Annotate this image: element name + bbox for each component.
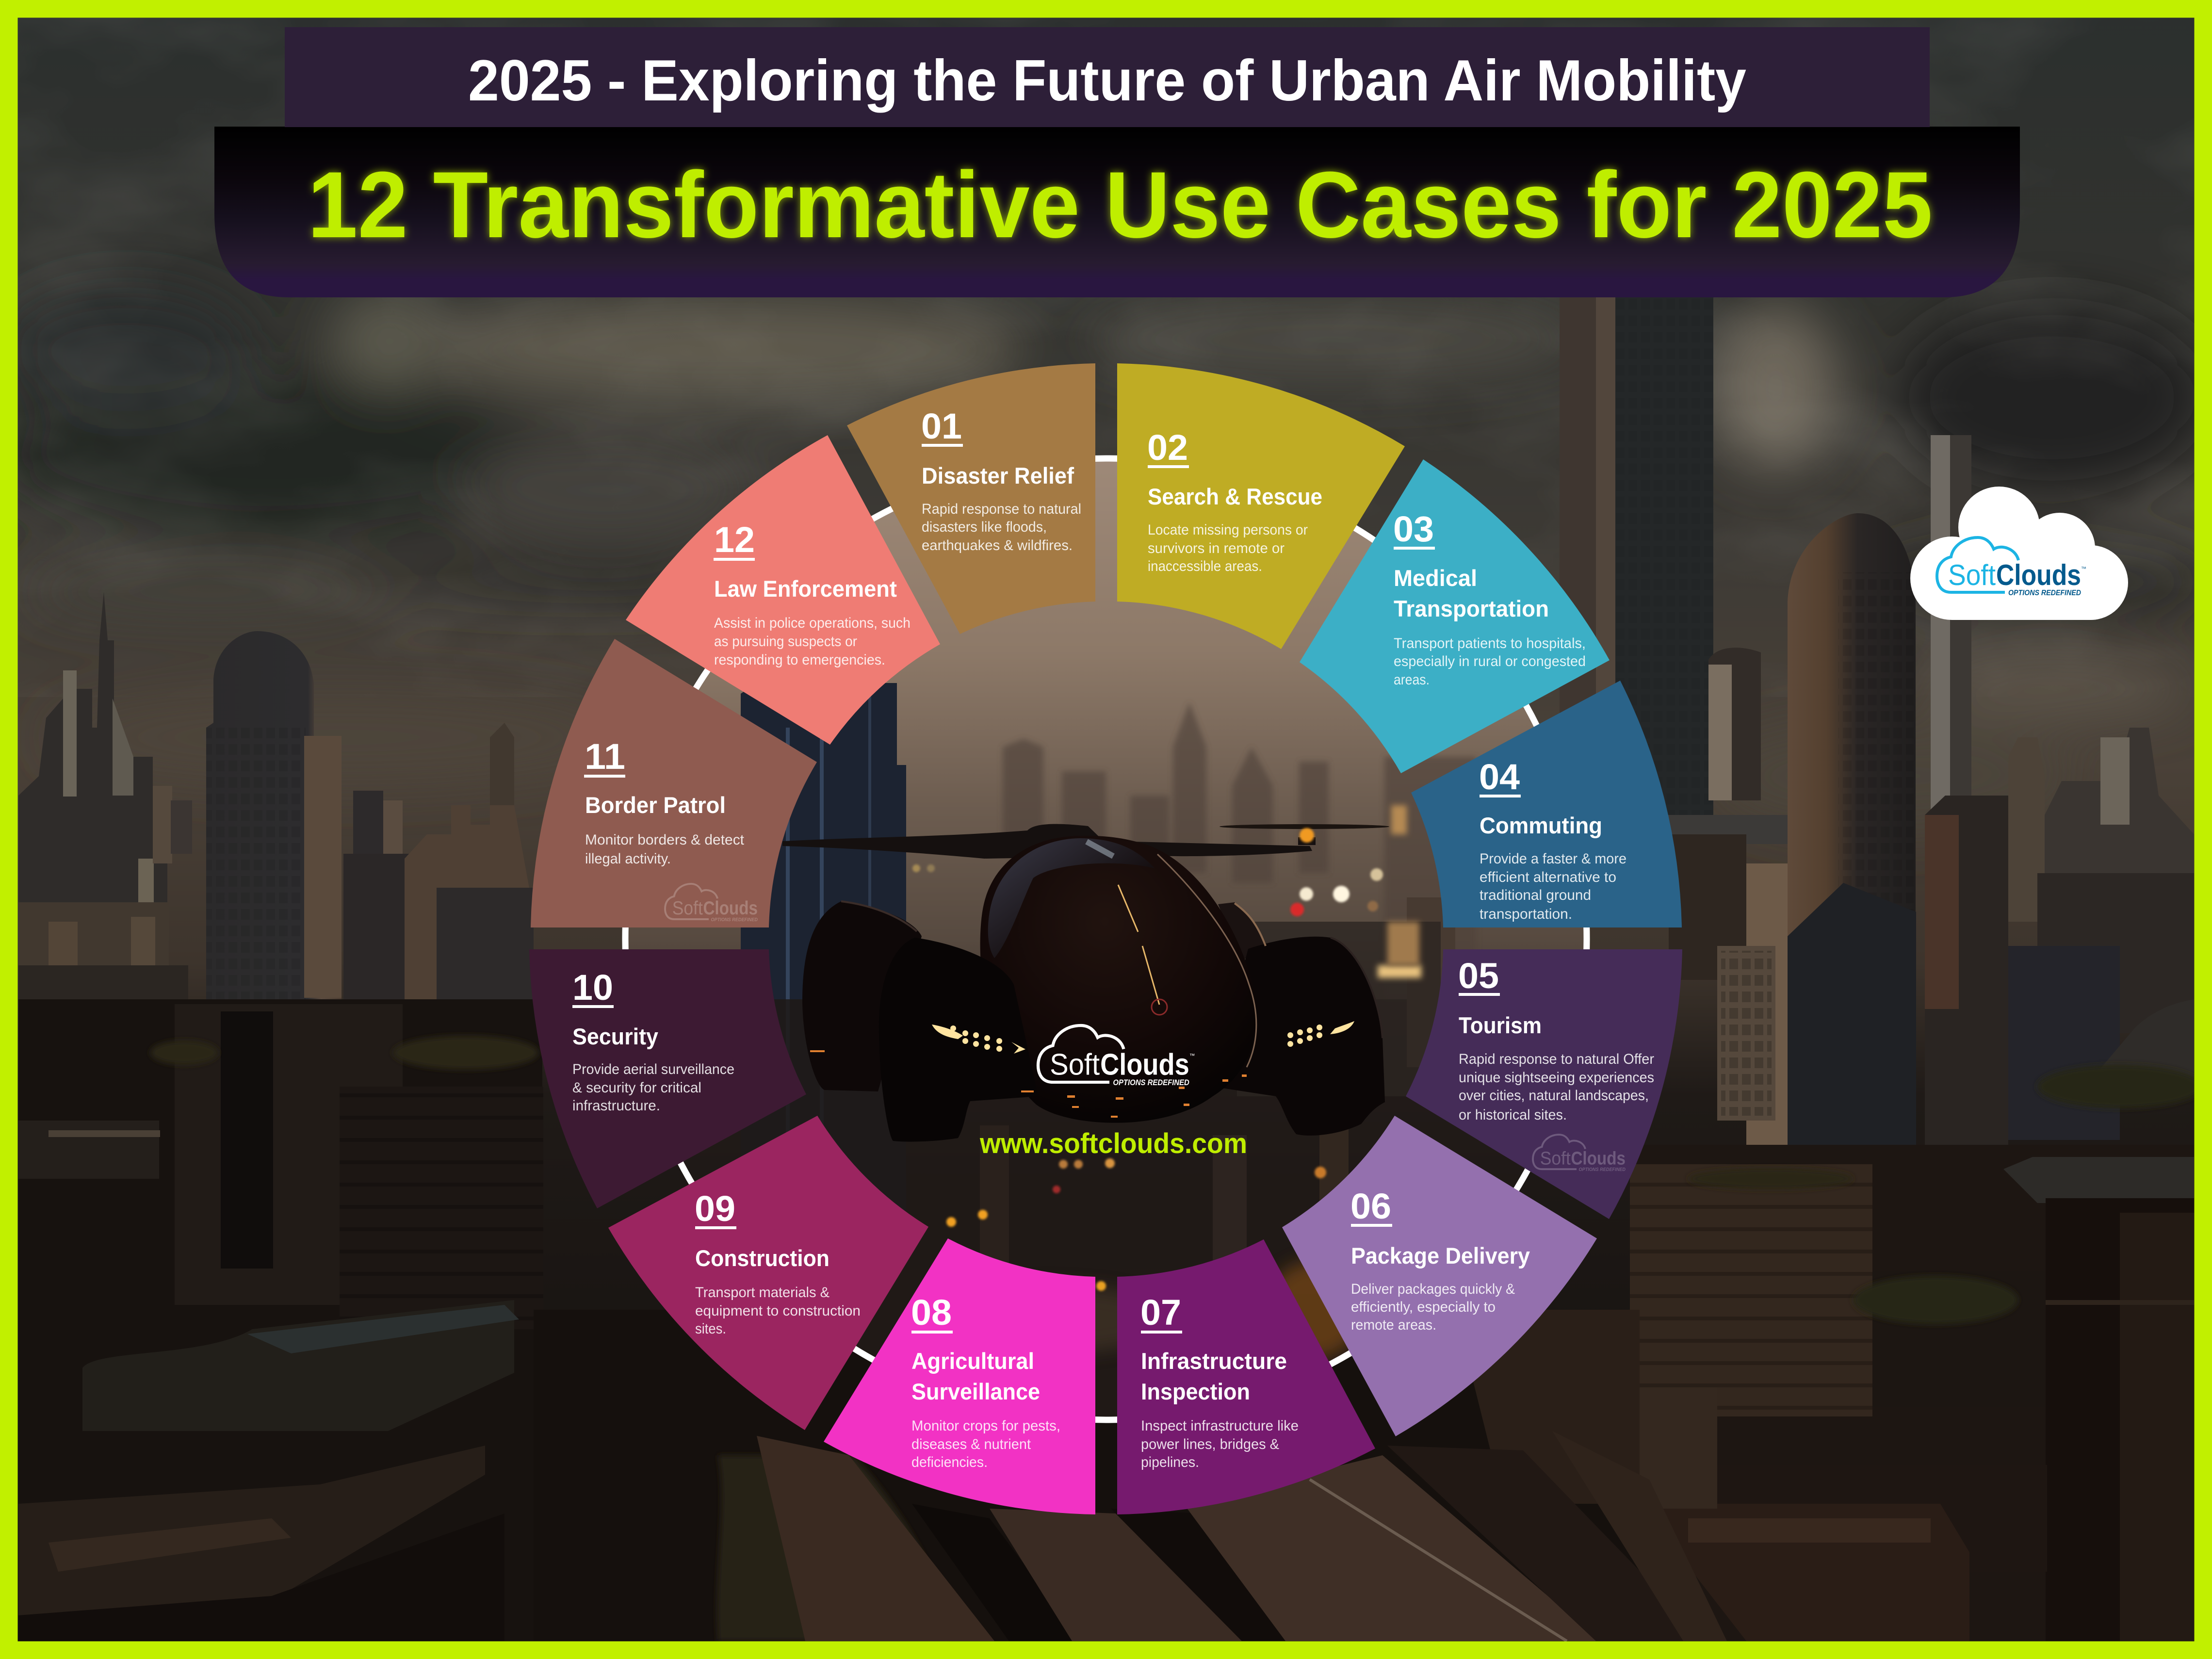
description: transportation. <box>1480 906 1572 922</box>
title: Law Enforcement <box>714 576 897 602</box>
panel: 04 Commuting <box>1411 681 1682 927</box>
canopy sheen <box>988 838 1155 958</box>
main fuselage <box>980 836 1257 1123</box>
title: Agricultural <box>911 1348 1034 1374</box>
logo: SoftClouds cloud badge: ™ <box>2081 566 2086 572</box>
description <box>1459 1051 1654 1123</box>
description <box>695 1285 861 1337</box>
logo: white SoftClouds on car: Clouds <box>1100 1048 1189 1081</box>
description: Provide a faster & more <box>1480 851 1626 867</box>
description: responding to emergencies. <box>714 652 885 668</box>
rotor and wing light <box>1220 824 1389 845</box>
title: 12 Transformative Use Cases: 12 Transformative Use Cases for 2025 <box>308 152 1933 258</box>
flying car <box>782 824 1389 1142</box>
description: Transport materials & <box>695 1285 830 1301</box>
description: Monitor borders & detect <box>585 832 745 848</box>
far skyline left <box>18 592 192 1024</box>
watermark logo: Clouds <box>1571 1148 1626 1169</box>
description: sites. <box>695 1321 726 1337</box>
description <box>1141 1418 1299 1470</box>
number 01: 01 <box>921 406 962 446</box>
watermark logo <box>665 884 758 923</box>
headlights <box>932 1021 1354 1054</box>
description: equipment to construction <box>695 1303 861 1319</box>
description <box>1480 851 1626 922</box>
number 03: 03 <box>1393 509 1434 549</box>
number 07: 07 <box>1140 1292 1181 1333</box>
title: Security <box>572 1024 658 1049</box>
description: Rapid response to natural <box>922 501 1081 517</box>
description: traditional ground <box>1480 887 1591 903</box>
tower: left cylinder <box>206 631 342 1009</box>
number 04: 04 <box>1479 757 1520 797</box>
panel: 10 Security <box>529 949 806 1208</box>
description: pipelines. <box>1141 1454 1199 1470</box>
panel: 07 Infrastructure Inspection <box>1117 1239 1375 1514</box>
number 08: 08 <box>911 1292 952 1333</box>
tall building top right <box>1560 296 1795 1150</box>
logo: white SoftClouds on car <box>1038 1025 1195 1087</box>
title: Inspection <box>1141 1379 1250 1404</box>
number 12: 12 <box>714 520 755 560</box>
panel: 06 Package Delivery <box>1282 1116 1597 1436</box>
logo: SoftClouds cloud badge: Soft <box>1948 559 1996 591</box>
number 09: 09 <box>695 1188 735 1229</box>
description <box>714 615 911 668</box>
heading banner: main title <box>214 127 2020 297</box>
title: Search & Rescue <box>1148 484 1322 509</box>
number 05: 05 <box>1458 956 1499 996</box>
number 10: 10 <box>572 967 613 1008</box>
subtitle text: 2025 - Exploring the Future of Urban Air Mobility <box>468 48 1746 113</box>
description: as pursuing suspects or <box>714 634 857 650</box>
mid skyline left <box>343 723 534 999</box>
number 06: 06 <box>1350 1186 1391 1226</box>
description: Assist in police operations, such <box>714 615 911 631</box>
description: over cities, natural landscapes, <box>1459 1088 1649 1104</box>
watermark logo: Soft <box>1540 1148 1571 1169</box>
description: or historical sites. <box>1459 1107 1567 1123</box>
center photo disc with white ring <box>625 458 1587 1421</box>
description: illegal activity. <box>585 851 671 867</box>
logo: SoftClouds cloud badge <box>1910 487 2128 620</box>
car highlights <box>841 842 1382 1067</box>
title: Package Delivery <box>1351 1243 1530 1269</box>
panel: 08 Agricultural Surveillance <box>824 1238 1095 1514</box>
panel: 11 Border Patrol <box>531 639 817 927</box>
logo: SoftClouds cloud badge: Clouds <box>1996 559 2081 591</box>
logo: white SoftClouds on car: OPTIONS REDEFINED <box>1113 1078 1189 1087</box>
lower city right <box>1630 1065 2202 1641</box>
title: Commuting <box>1480 813 1602 838</box>
wings <box>782 824 1312 859</box>
description: Inspect infrastructure like <box>1141 1418 1299 1434</box>
description: Provide aerial surveillance <box>572 1061 734 1077</box>
description <box>1351 1281 1515 1333</box>
description: & security for critical <box>572 1080 701 1096</box>
description: power lines, bridges & <box>1141 1436 1279 1452</box>
heading banner: subtitle <box>285 27 1930 127</box>
title <box>911 1348 1040 1404</box>
title <box>1141 1348 1287 1404</box>
description: earthquakes & wildfires. <box>922 537 1073 553</box>
rear right pod <box>1218 902 1267 960</box>
description: inaccessible areas. <box>1148 558 1262 574</box>
logo: white SoftClouds on car: Soft <box>1050 1048 1100 1081</box>
description: Monitor crops for pests, <box>911 1418 1060 1434</box>
description <box>585 832 745 867</box>
clouds <box>0 286 2212 830</box>
description: disasters like floods, <box>922 519 1047 535</box>
panel: 09 Construction <box>608 1116 928 1430</box>
description <box>922 501 1081 553</box>
description <box>572 1061 734 1114</box>
title <box>1394 565 1549 621</box>
watermark logo: OPTIONS REDEFINED <box>1579 1167 1626 1172</box>
dark blue skyscraper <box>741 683 906 1261</box>
title: Disaster Relief <box>922 463 1074 488</box>
rear left pod <box>802 901 922 1091</box>
sparkle lights <box>810 1050 1247 1118</box>
description <box>1148 522 1308 574</box>
description: efficiently, especially to <box>1351 1299 1496 1315</box>
title: Border Patrol <box>585 792 726 818</box>
description: especially in rural or congested <box>1394 653 1586 669</box>
panel: 05 Tourism <box>1406 949 1682 1219</box>
description <box>1394 635 1586 688</box>
description: Locate missing persons or <box>1148 522 1308 538</box>
description: Transport patients to hospitals, <box>1394 635 1586 651</box>
description: areas. <box>1394 672 1430 688</box>
watermark logo <box>1533 1135 1626 1172</box>
hazy distant towers <box>1001 704 1477 915</box>
website url: www.softclouds.com <box>979 1128 1247 1159</box>
description: Deliver packages quickly & <box>1351 1281 1515 1297</box>
logo: SoftClouds cloud badge: OPTIONS REDEFINED <box>2008 589 2081 597</box>
description: survivors in remote or <box>1148 540 1285 556</box>
title: Tourism <box>1459 1012 1542 1038</box>
watermark logo: Soft <box>672 898 703 919</box>
logo: white SoftClouds on car: ™ <box>1189 1053 1195 1059</box>
number 11: 11 <box>585 736 625 777</box>
central road and trees <box>534 1310 1727 1641</box>
number 02: 02 <box>1147 427 1188 468</box>
panel: 12 Law Enforcement <box>626 435 940 745</box>
description: remote areas. <box>1351 1317 1436 1333</box>
title: Medical <box>1394 565 1477 591</box>
title: Infrastructure <box>1141 1348 1287 1374</box>
watermark logo: OPTIONS REDEFINED <box>711 917 758 923</box>
description: deficiencies. <box>911 1454 988 1470</box>
tower: right cylinder and far buildings <box>1788 435 2195 1164</box>
panel: 01 Disaster Relief <box>847 363 1095 634</box>
panel: 02 Search & Rescue <box>1117 363 1405 649</box>
watermark logo: Clouds <box>703 898 758 919</box>
title: Surveillance <box>911 1379 1040 1404</box>
front left pod <box>879 938 1038 1142</box>
description: diseases & nutrient <box>911 1436 1031 1452</box>
right pod <box>1213 937 1385 1136</box>
description <box>911 1418 1060 1470</box>
description: efficient alternative to <box>1480 869 1616 885</box>
title: Construction <box>695 1245 830 1271</box>
lower city left <box>18 999 543 1641</box>
description: infrastructure. <box>572 1098 660 1114</box>
title: Transportation <box>1394 596 1549 621</box>
description: unique sightseeing experiences <box>1459 1070 1654 1086</box>
description: Rapid response to natural Offer <box>1459 1051 1654 1067</box>
panel: 03 Medical Transportation <box>1300 459 1610 773</box>
city lights <box>912 805 1421 1291</box>
